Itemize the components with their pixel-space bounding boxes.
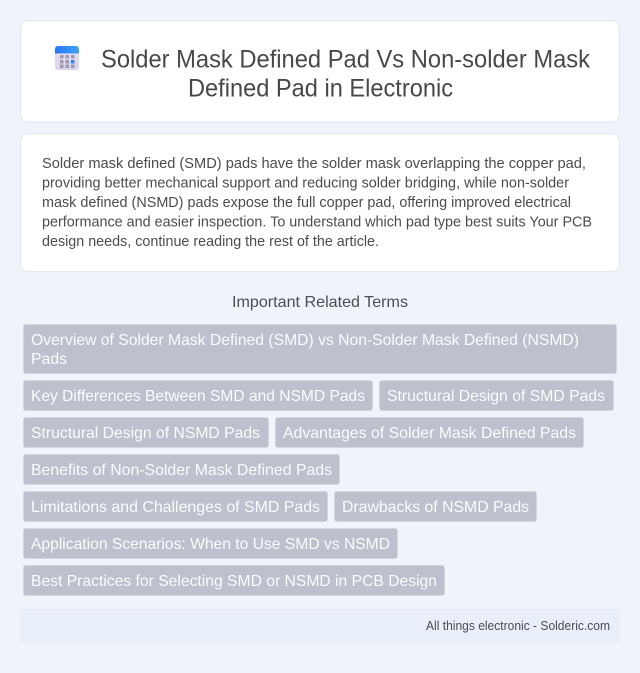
chip: structural design of NSMD: Structural Design of NSMD Pads <box>31 425 260 442</box>
chip: limitations: Limitations and Challenges of SMD Pads <box>31 499 320 516</box>
chip: structural design of SMD: Structural Design of SMD Pads <box>387 388 605 405</box>
text block: introduction: design needs, continue reading the rest of the article. <box>42 234 379 250</box>
icon: calendar grid <box>55 46 79 70</box>
text block: introduction: mask defined (NSMD) pads expose the full copper pad, offering improved electrical <box>42 195 571 211</box>
chip: benefits: Benefits of Non-Solder Mask Defined Pads <box>31 462 332 479</box>
chip: best practices: Best Practices for Selecting SMD or NSMD in PCB Design <box>31 573 437 590</box>
text block: introduction: Solder mask defined (SMD) pads have the solder mask overlapping the copper pad, <box>42 156 586 172</box>
chip: overview <box>24 324 616 374</box>
chip: overview: Pads <box>31 351 67 368</box>
chip: advantages: Advantages of Solder Mask Defined Pads <box>283 425 576 442</box>
chip: limitations <box>24 492 328 522</box>
chip: application scenarios: Application Scenarios: When to Use SMD vs NSMD <box>31 536 390 553</box>
text block: introduction: performance and easier inspection. To understand which pad type best suits Your PCB <box>42 214 592 230</box>
title: Defined Pad in Electronic <box>188 74 453 102</box>
chip: key differences <box>24 380 372 410</box>
chip: structural design of SMD <box>380 380 614 410</box>
chip: application scenarios <box>24 528 398 558</box>
title: Solder Mask Defined Pad Vs Non-solder Mask <box>101 46 590 74</box>
panel: introduction text <box>20 134 620 272</box>
chip: overview: Overview of Solder Mask Defined (SMD) vs Non-Solder Mask Defined (NSMD) <box>31 332 579 349</box>
text block: introduction <box>42 156 592 250</box>
chip: drawbacks: Drawbacks of NSMD Pads <box>342 499 529 516</box>
chip: best practices <box>24 566 444 596</box>
chip: benefits <box>24 454 340 484</box>
chip: key differences: Key Differences Between SMD and NSMD Pads <box>31 388 365 405</box>
footer: All things electronic - Solderic.com <box>426 618 610 633</box>
panel: header card <box>20 20 620 122</box>
heading: important related terms: Important Related Terms <box>232 294 408 311</box>
panel: related term chips <box>24 324 616 596</box>
footer <box>20 609 620 643</box>
chip: advantages <box>276 418 584 448</box>
chip: structural design of NSMD <box>24 418 268 448</box>
text block: introduction: providing better mechanical support and reducing solder bridging, while non-solder <box>42 176 569 192</box>
title <box>101 46 590 102</box>
chip: drawbacks <box>334 492 536 522</box>
